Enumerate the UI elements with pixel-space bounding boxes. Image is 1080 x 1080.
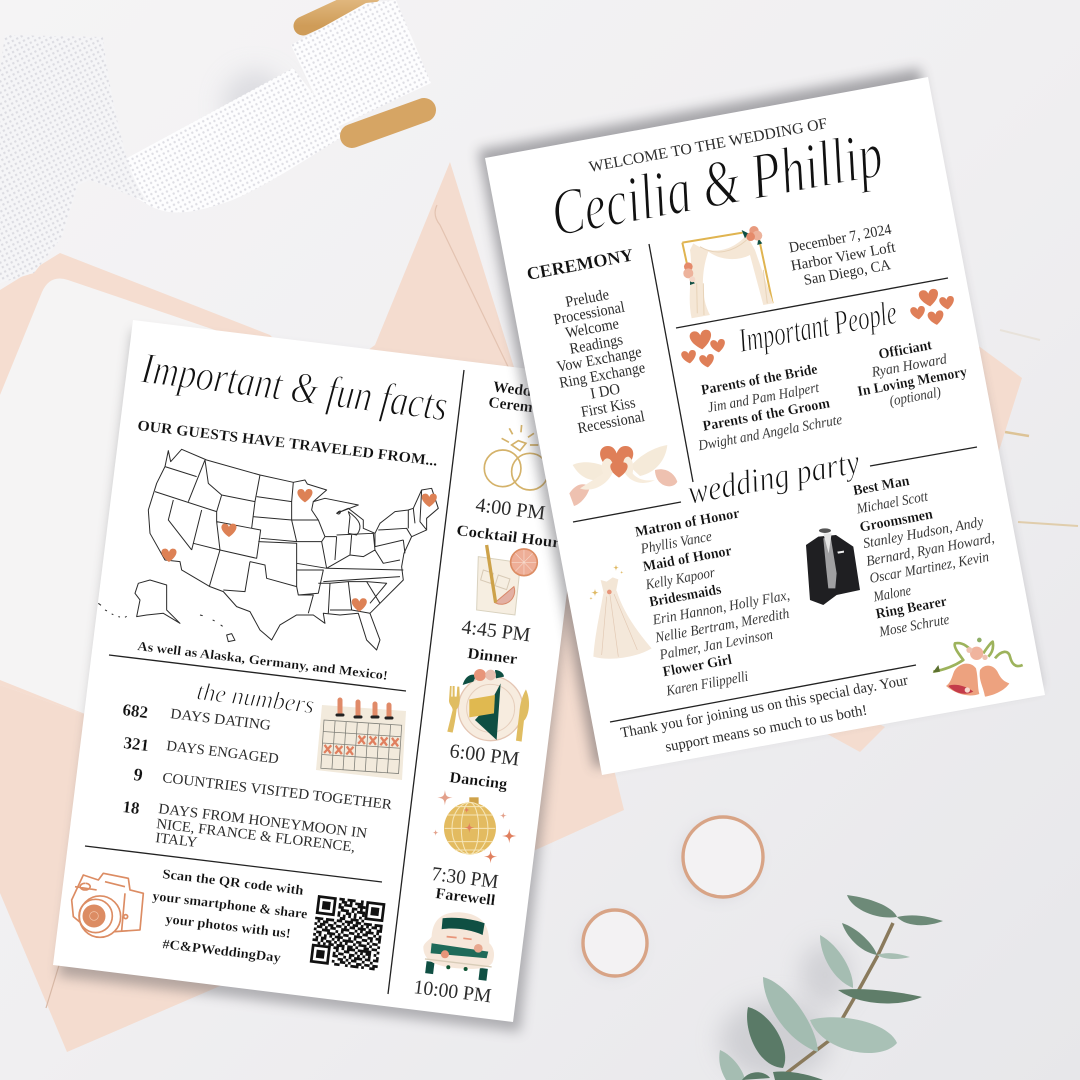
icon: camera — [72, 873, 143, 937]
wooden spool with ribbon — [291, 0, 431, 136]
bridal party list: Flower Girl — [661, 652, 733, 680]
groom party list: Oscar Martinez, Kevin — [868, 549, 990, 587]
event details: December 7, 2024 — [788, 222, 893, 256]
groom party list: Ring Bearer — [874, 594, 949, 622]
script heading: wedding party: wedding party — [685, 444, 863, 512]
ceremony order list: Welcome — [564, 315, 620, 342]
icon: black suit — [806, 528, 860, 605]
map of the United States — [98, 449, 438, 650]
ceremony order list: Vow Exchange — [555, 343, 643, 376]
stats list: DAYS DATING — [170, 706, 272, 734]
bridal party list: Bridesmaids — [648, 581, 723, 611]
groom party list: Michael Scott — [855, 488, 930, 518]
timeline column — [412, 378, 561, 1007]
time: 7:30 PM: 7:30 PM — [430, 863, 500, 893]
timeline: farewell: Farewell — [435, 885, 497, 909]
officiant list: Ryan Howard — [870, 351, 949, 381]
title: important and fun facts: Important & fun facts — [138, 343, 450, 431]
officiant list — [856, 337, 969, 410]
shadow of right card — [478, 68, 1040, 768]
ribbon — [0, 35, 345, 283]
groom party list: Best Man — [852, 473, 911, 499]
icon: floral arch — [682, 226, 773, 318]
icon: wedding dress — [589, 564, 652, 659]
timeline: wedding ceremony: Wedding — [492, 378, 553, 403]
ceremony order list: Ring Exchange — [558, 359, 647, 392]
timeline: dinner: Dinner — [467, 645, 518, 668]
timeline: wedding ceremony — [487, 378, 558, 419]
envelope: second behind right card — [820, 330, 1022, 752]
bridal party list: Karen Filippelli — [664, 669, 750, 700]
groom party list: Stanley Hudson, Andy — [862, 514, 985, 552]
stats list: DAYS ENGAGED — [166, 738, 280, 767]
icon: hearts left — [681, 329, 726, 368]
officiant list: (optional) — [888, 384, 942, 410]
stats list: ITALY — [155, 830, 199, 851]
icon: hearts right — [910, 288, 955, 326]
ceremony order list: I DO — [589, 380, 621, 403]
script heading: the numbers: the numbers — [195, 678, 316, 719]
bridal party list: Maid of Honor — [642, 543, 734, 575]
stats list: DAYS FROM HONEYMOON IN — [158, 801, 368, 842]
time: 4:00 PM: 4:00 PM — [474, 494, 547, 525]
panel: important and fun facts card — [53, 320, 594, 1022]
bridal party list: Phyllis Vance — [639, 529, 714, 558]
stats list: 682 — [122, 700, 149, 722]
officiant list: In Loving Memory — [856, 364, 969, 400]
bridal party list: Kelly Kapoor — [644, 565, 716, 593]
icon: calendar — [316, 700, 406, 780]
ceremony order list: Processional — [552, 299, 626, 328]
groom party list: Bernard, Ryan Howard, — [865, 530, 996, 570]
heading: ceremony: CEREMONY — [525, 245, 635, 284]
event details — [788, 222, 898, 289]
ceremony order list: Readings — [568, 331, 624, 358]
QR code — [310, 895, 385, 971]
timeline: dancing: Dancing — [449, 769, 508, 793]
eucalyptus sprig — [719, 895, 943, 1080]
heading: welcome: WELCOME TO THE WEDDING OF — [588, 115, 829, 176]
stats list: COUNTRIES VISITED TOGETHER — [162, 770, 393, 813]
stats list: 18 — [122, 797, 141, 818]
timeline: cocktail hour: Cocktail Hour — [456, 522, 561, 552]
event details: Harbor View Loft — [790, 239, 898, 275]
stats list — [122, 700, 393, 856]
bridal party list: Erin Hannon, Holly Flax, — [651, 588, 791, 629]
shadow of left card — [58, 330, 590, 1032]
bridal party list: Nellie Bertram, Meredith — [653, 606, 791, 646]
QR instructions text: your smartphone & share — [152, 888, 308, 921]
bridal party list: Matron of Honor — [634, 505, 741, 541]
stats list: 9 — [133, 764, 144, 785]
QR instructions text — [152, 866, 308, 965]
column dividers — [573, 244, 977, 722]
ceremony order list — [552, 286, 647, 437]
thank you message: support means so much to us both! — [664, 703, 869, 756]
icon: doves with heart — [569, 445, 677, 506]
timeline: wedding ceremony: Ceremony — [487, 394, 558, 419]
ceremony order list: Prelude — [564, 286, 610, 311]
thank you message: Thank you for joining us on this special day. Your — [619, 673, 909, 742]
panel: welcome card — [485, 77, 1045, 775]
event details: San Diego, CA — [803, 257, 892, 289]
ceremony order list: First Kiss — [580, 394, 637, 421]
ceremony order list: Recessional — [576, 408, 646, 437]
parents list: Jim and Pam Halpert — [706, 380, 821, 416]
time: 6:00 PM: 6:00 PM — [448, 740, 521, 771]
heading: guests traveled: OUR GUESTS HAVE TRAVELED FROM... — [137, 418, 439, 470]
QR instructions text: #C&PWeddingDay — [162, 936, 282, 965]
stats list: NICE, FRANCE & FLORENCE, — [156, 816, 356, 856]
envelope: back left with liner — [0, 253, 330, 720]
groom party list: Groomsmen — [858, 506, 934, 536]
title: couple names: Cecilia & Phillip — [545, 118, 888, 251]
wedding rings on marble — [578, 817, 763, 979]
groom party list — [852, 473, 996, 641]
QR instructions text: Scan the QR code with — [162, 866, 305, 898]
bridal party list: Palmer, Jan Levinson — [657, 627, 774, 664]
icon: dinner plate — [447, 669, 529, 742]
icon: gold rings — [484, 425, 548, 490]
groom party list: Malone — [871, 583, 913, 606]
icon: wedding bells — [933, 638, 1023, 697]
bridal party list — [634, 505, 791, 700]
script heading: important people: Important People — [735, 294, 900, 360]
parents list — [696, 361, 844, 454]
parents list: Dwight and Angela Schrute — [696, 412, 844, 454]
parents list: Parents of the Bride — [700, 361, 819, 399]
icon: cocktail — [477, 545, 537, 615]
inset: Alaska and Hawaii — [135, 580, 180, 623]
time: 4:45 PM: 4:45 PM — [460, 616, 532, 646]
icon: getaway car — [423, 912, 494, 981]
icon: disco ball — [432, 790, 517, 863]
text: other places: As well as Alaska, Germany, and Mexico! — [137, 638, 389, 683]
QR instructions text: your photos with us! — [165, 911, 292, 941]
groom party list: Mose Schrute — [877, 612, 951, 641]
stats list: 321 — [123, 733, 150, 755]
envelope: peach flap and lower body — [0, 162, 624, 1052]
officiant list: Officiant — [877, 337, 933, 363]
hearts on map — [161, 489, 437, 612]
time: 10:00 PM: 10:00 PM — [412, 976, 493, 1007]
parents list: Parents of the Groom — [701, 395, 831, 435]
